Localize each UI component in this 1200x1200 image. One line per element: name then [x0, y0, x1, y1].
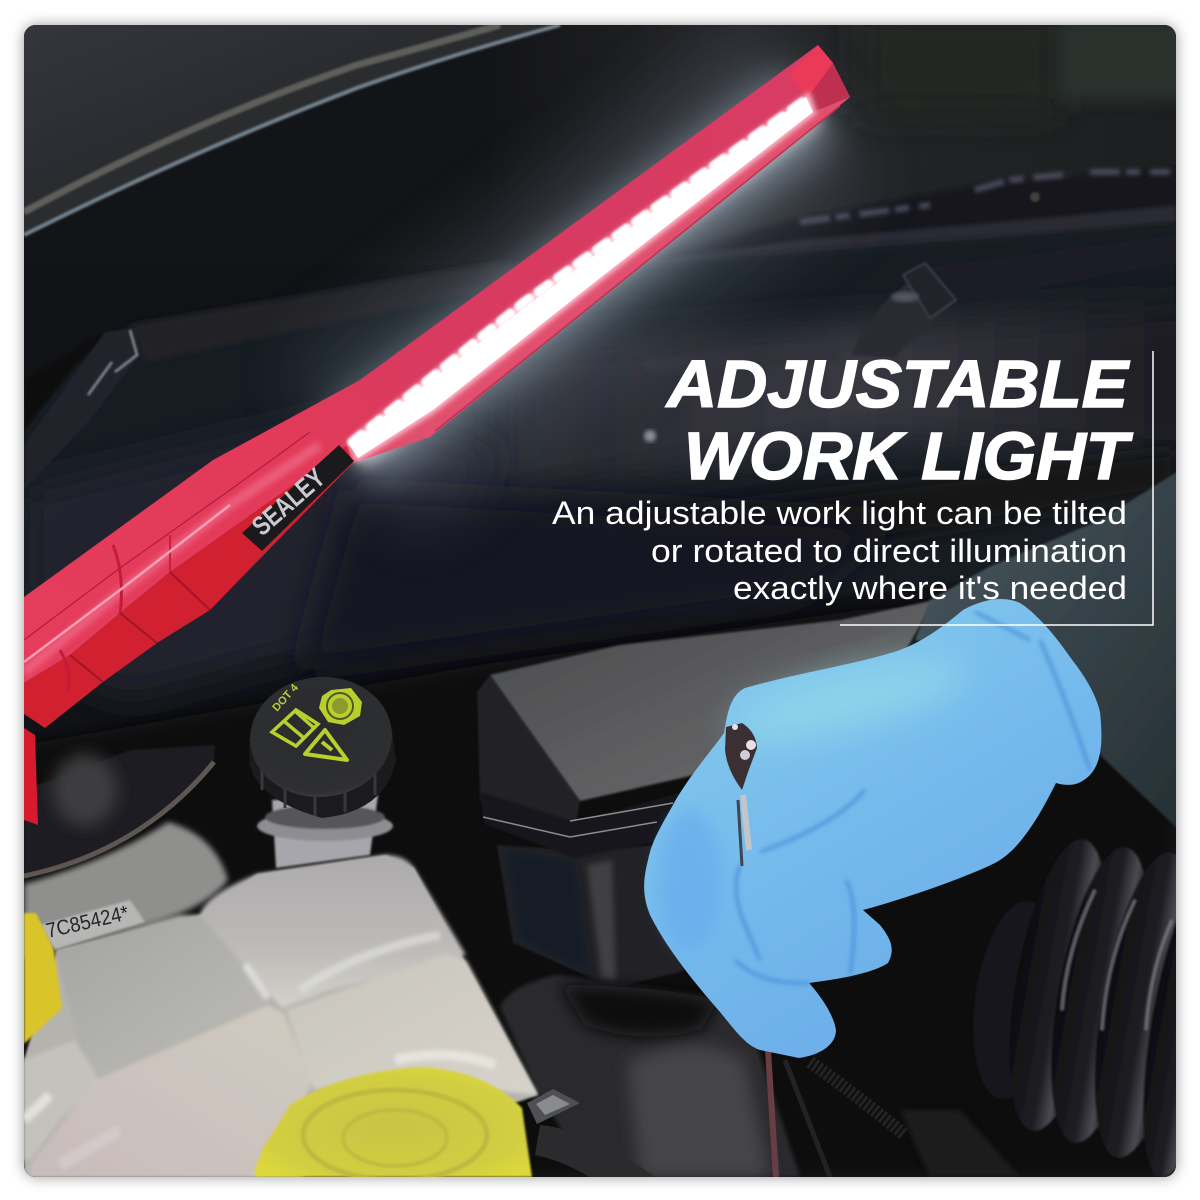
description: or rotated to direct illumination — [651, 533, 1127, 569]
sleeve — [915, 470, 1180, 827]
left yellow cap — [24, 913, 62, 1044]
air box left side — [477, 675, 580, 830]
coolant expansion tank — [24, 855, 538, 1177]
black bracket — [24, 328, 140, 490]
wiper cowl — [698, 166, 1176, 252]
work light glow — [292, 25, 870, 530]
headline: ADJUSTABLE — [665, 347, 1130, 422]
air box — [477, 600, 935, 989]
cap text: DOT 4 — [270, 681, 301, 714]
LED glow on body — [351, 97, 813, 458]
air box lower front — [497, 844, 684, 984]
tank highlights — [24, 935, 495, 1165]
tank left low section — [24, 1040, 100, 1160]
light upper body — [24, 45, 850, 683]
mid panels — [24, 225, 1200, 700]
connector and cable — [527, 1089, 655, 1177]
cap top — [250, 677, 392, 797]
facet lines — [24, 432, 310, 690]
glove creases — [735, 612, 1090, 983]
large yellow cap — [255, 1067, 532, 1180]
tank front right lobe — [286, 954, 538, 1095]
headline — [665, 347, 1133, 494]
upper background — [24, 25, 1176, 240]
part number label: 7C85424* — [44, 902, 131, 943]
brake fluid reservoir — [245, 671, 397, 868]
headline: WORK LIGHT — [684, 419, 1133, 494]
tank base — [24, 855, 538, 1177]
glove light area — [727, 644, 973, 756]
icon: brake disc — [319, 688, 362, 725]
red cable — [24, 728, 38, 825]
light lower facet — [24, 440, 420, 728]
car hood underside — [24, 25, 560, 235]
hose right — [852, 235, 1176, 358]
cable bundle — [768, 1050, 1020, 1177]
description — [552, 495, 1127, 606]
lower dark band — [24, 590, 1176, 1177]
description: exactly where it's needed — [733, 570, 1127, 606]
brand badge: SEALEY — [246, 462, 331, 542]
icon: warning triangle — [305, 730, 347, 760]
LED strip — [349, 97, 813, 458]
handle highlight — [24, 445, 320, 672]
head lower edge — [347, 97, 850, 463]
LED scalloped edge — [352, 102, 802, 442]
tank back right lobe — [200, 855, 466, 1008]
air box seam — [480, 790, 690, 858]
headline text block — [552, 347, 1133, 606]
air box top — [490, 600, 935, 801]
tank front left lobe — [30, 1005, 312, 1177]
cap body — [249, 730, 396, 818]
blue glove — [644, 599, 1101, 1058]
tank back left lobe — [54, 912, 204, 1013]
corner frame line — [840, 351, 1153, 625]
red work light — [24, 45, 850, 728]
description: An adjustable work light can be tilted — [552, 495, 1127, 531]
reservoir neck — [257, 795, 393, 868]
reservoir dish behind — [24, 745, 228, 960]
ratchet tool — [725, 723, 757, 866]
icon: reservoir symbol — [272, 710, 318, 746]
head end cap — [790, 45, 833, 97]
lower black housing — [500, 975, 800, 1177]
corrugated air duct — [973, 839, 1176, 1177]
